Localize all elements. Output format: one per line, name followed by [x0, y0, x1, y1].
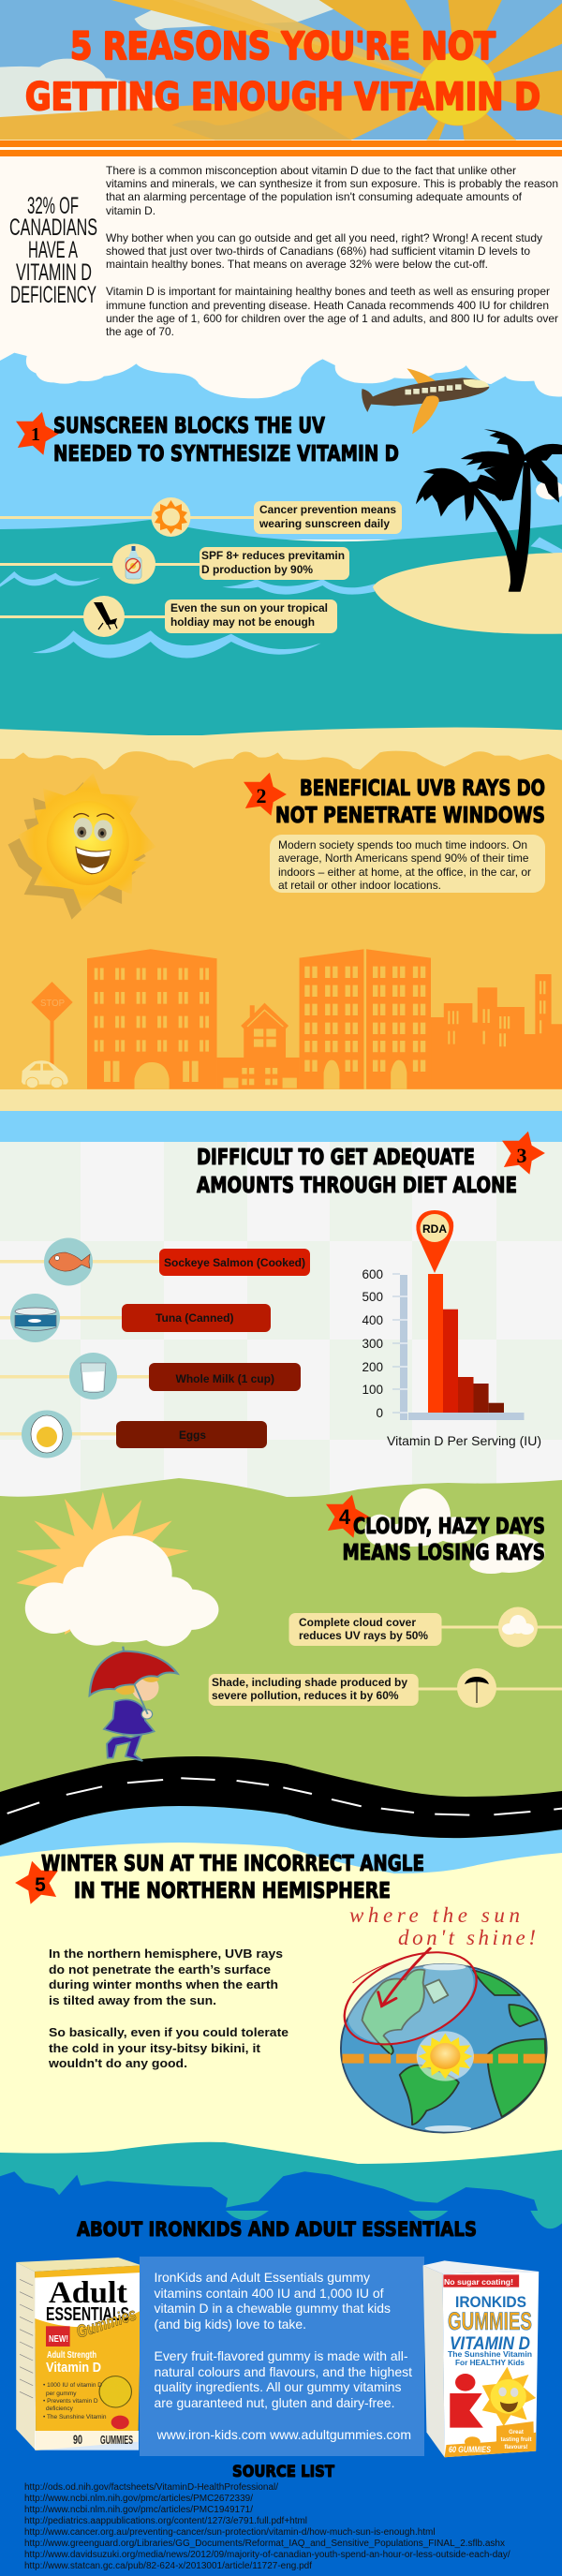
text block: indoors: at retail or other indoor locations. — [278, 879, 441, 892]
intro text: immune function and preventing disease. Heath Canada recommends 400 IU for children — [106, 299, 549, 312]
bar chart: vitamin D per serving: 400 — [362, 1313, 383, 1327]
callout: 32% deficiency: VITAMIN D — [16, 259, 92, 286]
panel: city section background — [0, 735, 562, 1112]
icon: palm trees — [416, 429, 562, 592]
text block: winter explanation: do not penetrate the earth’s surface — [49, 1962, 271, 1976]
bullet: shade — [209, 1668, 562, 1708]
product: IronKids box: Great — [509, 2430, 524, 2435]
heading: winter — [41, 1852, 424, 1903]
product: IronKids box: The Sunshine Vitamin — [448, 2350, 532, 2359]
intro text: maintain healthy bones. That means on average 32% were below the cut-off. — [106, 258, 488, 271]
illustration: city skyline — [87, 949, 562, 1089]
product: Adult Essentials box: 90 — [73, 2432, 82, 2447]
intro text — [106, 164, 558, 338]
sky band — [0, 1111, 562, 1142]
panel: about section background — [0, 2171, 562, 2576]
food row: milk — [0, 1353, 301, 1399]
product: Adult Essentials box: deficiency — [46, 2406, 74, 2412]
icon: sun behind cloud — [16, 1492, 218, 1646]
product: Adult Essentials box: Vitamin D — [46, 2360, 101, 2376]
road strip — [0, 1089, 562, 1111]
bullet: cancer prevention: Cancer prevention means — [259, 503, 396, 516]
heading: diet — [197, 1146, 517, 1198]
product: Adult Essentials box: Adult Strength — [47, 2350, 96, 2361]
product: Adult Essentials box: ESSENTIALS — [46, 2304, 129, 2325]
handwritten note: where the sun — [349, 1903, 520, 1927]
bar chart: vitamin D per serving: Vitamin D Per Serving (IU) — [387, 1433, 541, 1448]
text block: indoors: indoors – either at home, at the office, in the car, or — [278, 866, 531, 879]
food row: salmon: Sockeye Salmon (Cooked) — [164, 1256, 305, 1269]
callout: 32% deficiency: CANADIANS — [9, 215, 97, 241]
marker: RDA pin — [416, 1210, 453, 1273]
illustration: globe — [326, 1933, 547, 2133]
text block: winter explanation: wouldn't do any good. — [48, 2056, 187, 2070]
icon: car — [22, 1060, 68, 1088]
heading: UVB windows — [275, 777, 545, 828]
text panel: about the vitamins: natural colours and flavours, and the highest — [154, 2364, 412, 2379]
intro text: that an alarming percentage of the population isn't consuming adequate amounts of — [106, 190, 523, 203]
intro text: Why bother when you can go outside and get all you need, right? Wrong! A recent study — [106, 231, 542, 244]
callout: 32% deficiency — [9, 193, 97, 308]
icon: stop sign — [31, 982, 73, 1074]
text block: indoors — [270, 835, 545, 893]
bar chart: vitamin D per serving: 300 — [362, 1337, 383, 1351]
bullet: cloud cover: Complete cloud cover — [299, 1616, 416, 1629]
product: Adult Essentials box: NEW! — [49, 2334, 68, 2345]
callout: 32% deficiency: DEFICIENCY — [10, 282, 96, 308]
icon: fish — [49, 1252, 90, 1271]
intro text: under the age of 1, 600 for children over the age of 1 and adults, and 800 IU for adults over — [106, 312, 558, 325]
source links: http://www.statcan.gc.ca/pub/82-624-x/2013001/article/11727-eng.pdf — [24, 2561, 312, 2571]
bullet: SPF: D production by 90% — [201, 563, 313, 576]
icon: glass of milk — [81, 1363, 106, 1392]
header banner — [0, 0, 562, 140]
icon: umbrella — [465, 1677, 489, 1703]
text panel: about the vitamins: IronKids and Adult Essentials gummy — [154, 2270, 370, 2285]
text block: indoors: average, North Americans spend 90% of their time — [278, 851, 529, 865]
icon: sun — [155, 500, 187, 534]
source links: http://www.ncbi.nlm.nih.gov/pmc/articles/PMC2672339/ — [24, 2494, 253, 2504]
text panel: about the vitamins: Every fruit-flavored gummy is made with all- — [154, 2348, 408, 2363]
heading: about: ABOUT IRONKIDS AND ADULT ESSENTIALS — [77, 2218, 477, 2241]
text panel: about the vitamins: quality ingredients. All our gummy vitamins — [154, 2379, 401, 2394]
bar chart: vitamin D per serving — [362, 1267, 541, 1448]
product: IronKids box — [423, 2260, 539, 2457]
text panel: about the vitamins — [140, 2257, 424, 2456]
text block: winter explanation — [48, 1947, 288, 2070]
intro text: Vitamin D is important for maintaining healthy bones and teeth as well as ensuring proper — [106, 285, 550, 298]
bar chart: vitamin D per serving: 500 — [362, 1290, 383, 1304]
product: IronKids box: No sugar coating! — [444, 2277, 513, 2287]
callout: 32% deficiency: HAVE A — [28, 237, 78, 263]
heading: winter: IN THE NORTHERN HEMISPHERE — [74, 1879, 391, 1903]
food row: eggs: Eggs — [179, 1429, 206, 1442]
star number 5: 5 — [35, 1874, 46, 1896]
text block: winter explanation: So basically, even if you could tolerate — [49, 2025, 288, 2039]
bullet: shade: Shade, including shade produced by — [212, 1676, 407, 1689]
product: Adult Essentials box: • The Sunshine Vitamin — [43, 2414, 107, 2421]
product: Adult Essentials box: • Prevents vitamin D — [43, 2398, 98, 2405]
star badge 3 — [502, 1132, 545, 1175]
panel: diet section background — [0, 1142, 562, 1545]
bullet: SPF — [0, 543, 349, 585]
decorative clouds behind heading — [365, 1488, 545, 1574]
source links: http://www.greenguard.org/Libraries/GG_Documents/Reformat_IAQ_and_Sensitive_Populations_FINAL_2.sflb.ashx — [24, 2539, 505, 2549]
handwritten note — [349, 1903, 536, 1949]
text panel: about the vitamins: are guaranteed nut, gluten and dairy-free. — [154, 2395, 395, 2410]
source links: http://www.cancer.org.au/preventing-cancer/sun-protection/vitamin-d/how-much-sun-is-enough.html — [24, 2527, 436, 2538]
intro text: vitamins and minerals, we can synthesize it from sun exposure. This is probably the reason — [106, 177, 558, 190]
text block: winter explanation: during winter months when the earth — [49, 1977, 278, 1991]
product: Adult Essentials box: per gummy — [46, 2391, 77, 2397]
bullet: cancer prevention — [0, 497, 402, 537]
source links — [24, 2482, 510, 2571]
panel: cloudy section background — [0, 1478, 562, 1883]
bar chart: vitamin D per serving: 100 — [362, 1383, 383, 1397]
heading: sunscreen: SUNSCREEN BLOCKS THE UV — [53, 414, 325, 438]
icon: airplane — [362, 368, 489, 434]
product: Adult Essentials box — [16, 2258, 141, 2450]
icon: sunscreen bottle — [126, 546, 141, 579]
text panel: about the vitamins: vitamins contain 400 IU and 1,000 IU of — [154, 2286, 384, 2301]
product: IronKids box: VITAMIN D — [450, 2334, 530, 2354]
product: IronKids box: For HEALTHY Kids — [455, 2359, 525, 2367]
source links: http://ods.od.nih.gov/factsheets/VitaminD-HealthProfessional/ — [24, 2482, 278, 2493]
star badge 4: 4 — [339, 1505, 351, 1529]
intro text: vitamin D. — [106, 204, 155, 217]
product: Adult Essentials box: Adult — [49, 2276, 127, 2310]
heading: sunscreen — [53, 414, 399, 466]
intro text: the age of 70. — [106, 325, 174, 338]
bullet: cloud cover: reduces UV rays by 50% — [299, 1629, 428, 1642]
handwritten note: don't shine! — [398, 1926, 536, 1949]
text block: indoors: Modern society spends too much time indoors. On — [278, 838, 527, 851]
annotation: red circle and arrow — [326, 1933, 495, 2064]
product: IronKids box: flavours! — [504, 2445, 528, 2450]
product: IronKids box: tasting fruit — [500, 2437, 532, 2443]
icon: tuna can — [15, 1308, 56, 1330]
text block: winter explanation: the cold in your itsy-bitsy bikini, it — [49, 2041, 261, 2055]
icon: boiled egg — [31, 1415, 63, 1453]
icon: smiling sun mascot — [7, 773, 155, 920]
product: Adult Essentials box: • 1000 IU of vitamin D — [43, 2382, 102, 2389]
star badge 2: 2 — [257, 784, 266, 807]
callout: 32% deficiency: 32% OF — [27, 193, 79, 219]
bullet: tropical holiday — [0, 596, 337, 637]
food row: milk: Whole Milk (1 cup) — [176, 1372, 274, 1385]
food row: tuna — [0, 1294, 271, 1342]
star badge 1: 1 — [31, 424, 40, 445]
bullet: tropical holiday: Even the sun on your tropical — [170, 601, 328, 614]
star badge 3: 3 — [517, 1144, 526, 1167]
bullet: cloud cover — [288, 1607, 562, 1647]
star badge 1 — [16, 412, 59, 455]
marker: RDA pin: RDA — [422, 1222, 447, 1236]
bullet: tropical holiday: holdiay may not be enough — [170, 615, 315, 629]
icon: stop sign: STOP — [40, 999, 65, 1009]
heading: sunscreen: NEEDED TO SYNTHESIZE VITAMIN D — [53, 442, 399, 466]
panel: winter section background — [0, 1843, 562, 2248]
food row: salmon — [0, 1238, 310, 1285]
product: IronKids box: IRONKIDS — [455, 2293, 526, 2311]
heading: diet: DIFFICULT TO GET ADEQUATE — [197, 1146, 475, 1170]
star badge 2 — [244, 773, 287, 816]
text panel: about the vitamins: (and big kids) love to take. — [154, 2317, 306, 2332]
orange divider stripes — [0, 141, 562, 156]
bar chart: vitamin D per serving: 600 — [362, 1267, 383, 1281]
heading: source list: SOURCE LIST — [232, 2463, 334, 2481]
icon: beach chair — [94, 602, 117, 629]
product: Adult Essentials box: Gummies — [74, 2304, 139, 2343]
text panel: about the vitamins: vitamin D in a chewable gummy that kids — [154, 2301, 391, 2316]
text panel: about the vitamins: www.iron-kids.com www.adultgummies.com — [156, 2427, 411, 2442]
food row: eggs — [0, 1411, 267, 1458]
heading: cloudy — [343, 1515, 545, 1565]
bar chart: vitamin D per serving: 0 — [376, 1406, 383, 1420]
title — [25, 25, 540, 119]
bullet: SPF: SPF 8+ reduces previtamin — [201, 549, 345, 562]
heading: winter: WINTER SUN AT THE INCORRECT ANGLE — [41, 1852, 424, 1876]
bullet: cancer prevention: wearing sunscreen daily — [259, 517, 390, 530]
bullet: shade: severe pollution, reduces it by 60% — [212, 1689, 399, 1702]
star badge 5 — [15, 1861, 58, 1904]
source links: http://www.davidsuzuki.org/media/news/2012/09/majority-of-canadian-youth-spend-an-hour-or-less-outside-each-day/ — [24, 2550, 510, 2560]
food row: tuna: Tuna (Canned) — [155, 1311, 234, 1325]
panel: beach scene background — [0, 340, 562, 752]
source links: http://pediatrics.aappublications.org/content/127/3/e791.full.pdf+html — [24, 2516, 307, 2526]
star badge 4 — [326, 1495, 369, 1538]
product: IronKids box: 60 GUMMIES — [449, 2445, 491, 2454]
source links: http://www.ncbi.nlm.nih.gov/pmc/articles/PMC1949171/ — [24, 2505, 253, 2515]
icon: small cloud — [502, 1615, 534, 1635]
illustration: woman with umbrella — [90, 1647, 177, 1761]
product: Adult Essentials box: GUMMIES — [100, 2433, 133, 2447]
text block: winter explanation: In the northern hemisphere, UVB rays — [49, 1947, 283, 1961]
intro text: showed that just over two-thirds of Canadians (68%) had sufficient vitamin D levels to — [106, 244, 530, 258]
bar chart: vitamin D per serving: 200 — [362, 1360, 383, 1374]
intro text: There is a common misconception about vitamin D due to the fact that unlike other — [106, 164, 516, 177]
text block: winter explanation: is tilted away from the sun. — [49, 1993, 216, 2007]
